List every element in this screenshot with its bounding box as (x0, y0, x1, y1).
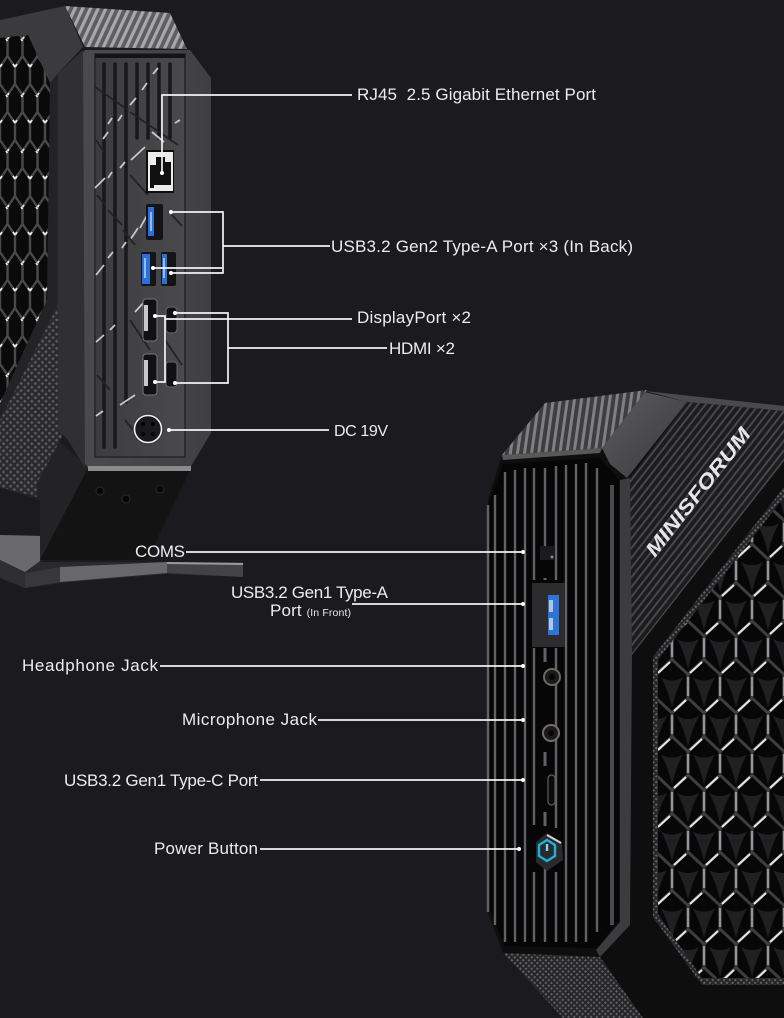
hex grille, front view (650, 480, 784, 990)
port: HDMI upper (143, 299, 157, 341)
device: back view of mini PC (0, 6, 243, 588)
grille border (653, 487, 784, 985)
base foot (0, 535, 243, 588)
top rim (502, 448, 602, 460)
label: DisplayPort: DisplayPort ×2 (357, 308, 471, 327)
label: Power Button: Power Button (154, 839, 258, 858)
jack: headphone (544, 669, 560, 685)
chamfer panel (602, 392, 687, 478)
main black body (488, 392, 784, 1018)
back face outer (68, 50, 211, 468)
stand screw holes (96, 485, 164, 503)
leader: COMS (186, 551, 523, 553)
label: Headphone Jack: Headphone Jack (22, 656, 158, 675)
jack: microphone (543, 725, 559, 741)
leader: USB Gen1 A (352, 603, 523, 605)
leader: RJ45 (162, 95, 352, 173)
label: USB3.2 Gen1 Type-A: USB3.2 Gen1 Type-A (231, 583, 389, 602)
leader: USB Gen2 (153, 212, 330, 273)
leader: power (260, 848, 519, 850)
port: USB-C front (548, 775, 555, 805)
port: HDMI lower (143, 354, 157, 395)
diagonal light accents (95, 68, 180, 416)
leader: DisplayPort (155, 316, 352, 382)
device: front view of mini PC (488, 390, 784, 1018)
panel top shadow (95, 54, 185, 58)
port: USB lower left (141, 252, 156, 286)
leader end dots (151, 171, 525, 851)
label: COMS: COMS (135, 542, 185, 561)
stand neck (40, 468, 190, 560)
port: USB front (532, 583, 565, 647)
carbon ribbed top (502, 390, 647, 455)
port: USB top (146, 204, 163, 240)
label: USB3.2 Gen1 Type-C: USB3.2 Gen1 Type-C Port (64, 771, 258, 790)
label: RJ45: RJ45 2.5 Gigabit Ethernet Port (357, 85, 596, 104)
port: USB lower right (161, 252, 176, 286)
body left side (0, 6, 88, 560)
hex grille, back view (0, 30, 52, 405)
COMS pinhole (540, 546, 554, 560)
port: DC 19V (132, 414, 164, 444)
label: HDMI: HDMI ×2 (389, 339, 455, 358)
carbon lower side panel (0, 297, 62, 497)
logo: MINISFORUM (642, 423, 757, 561)
side chamfer top (0, 6, 83, 83)
label: Microphone Jack: Microphone Jack (182, 710, 318, 729)
leader: DisplayPort and HDMI bracket (175, 313, 387, 383)
port: RJ45 (146, 150, 174, 193)
leader: DC (169, 429, 329, 431)
label: DC 19V: DC 19V (334, 423, 388, 440)
vent fins (488, 463, 612, 942)
leader lines (153, 95, 523, 849)
carbon bottom panel (503, 953, 643, 1018)
bright base rim (88, 466, 191, 471)
carbon logo panel (630, 402, 784, 655)
upper rim of main panel (645, 391, 784, 411)
carbon top panel (65, 6, 187, 49)
leader: headphone (160, 665, 523, 667)
back inner panel (95, 54, 185, 457)
leader: USB-C (260, 779, 523, 781)
port: DisplayPort upper (166, 307, 177, 333)
vent grooves (104, 64, 170, 447)
power button (536, 833, 563, 871)
port: DisplayPort lower (166, 362, 177, 387)
vent face (489, 458, 619, 948)
front right gray strip (596, 478, 632, 957)
label: USB3.2 Gen2: USB3.2 Gen2 Type-A Port ×3 (In Back) (331, 237, 633, 256)
leader: microphone (318, 719, 523, 721)
left inner strip (58, 50, 85, 468)
label: USB3.2 Gen1 Type-A second line: Port (In Front) (270, 601, 351, 620)
